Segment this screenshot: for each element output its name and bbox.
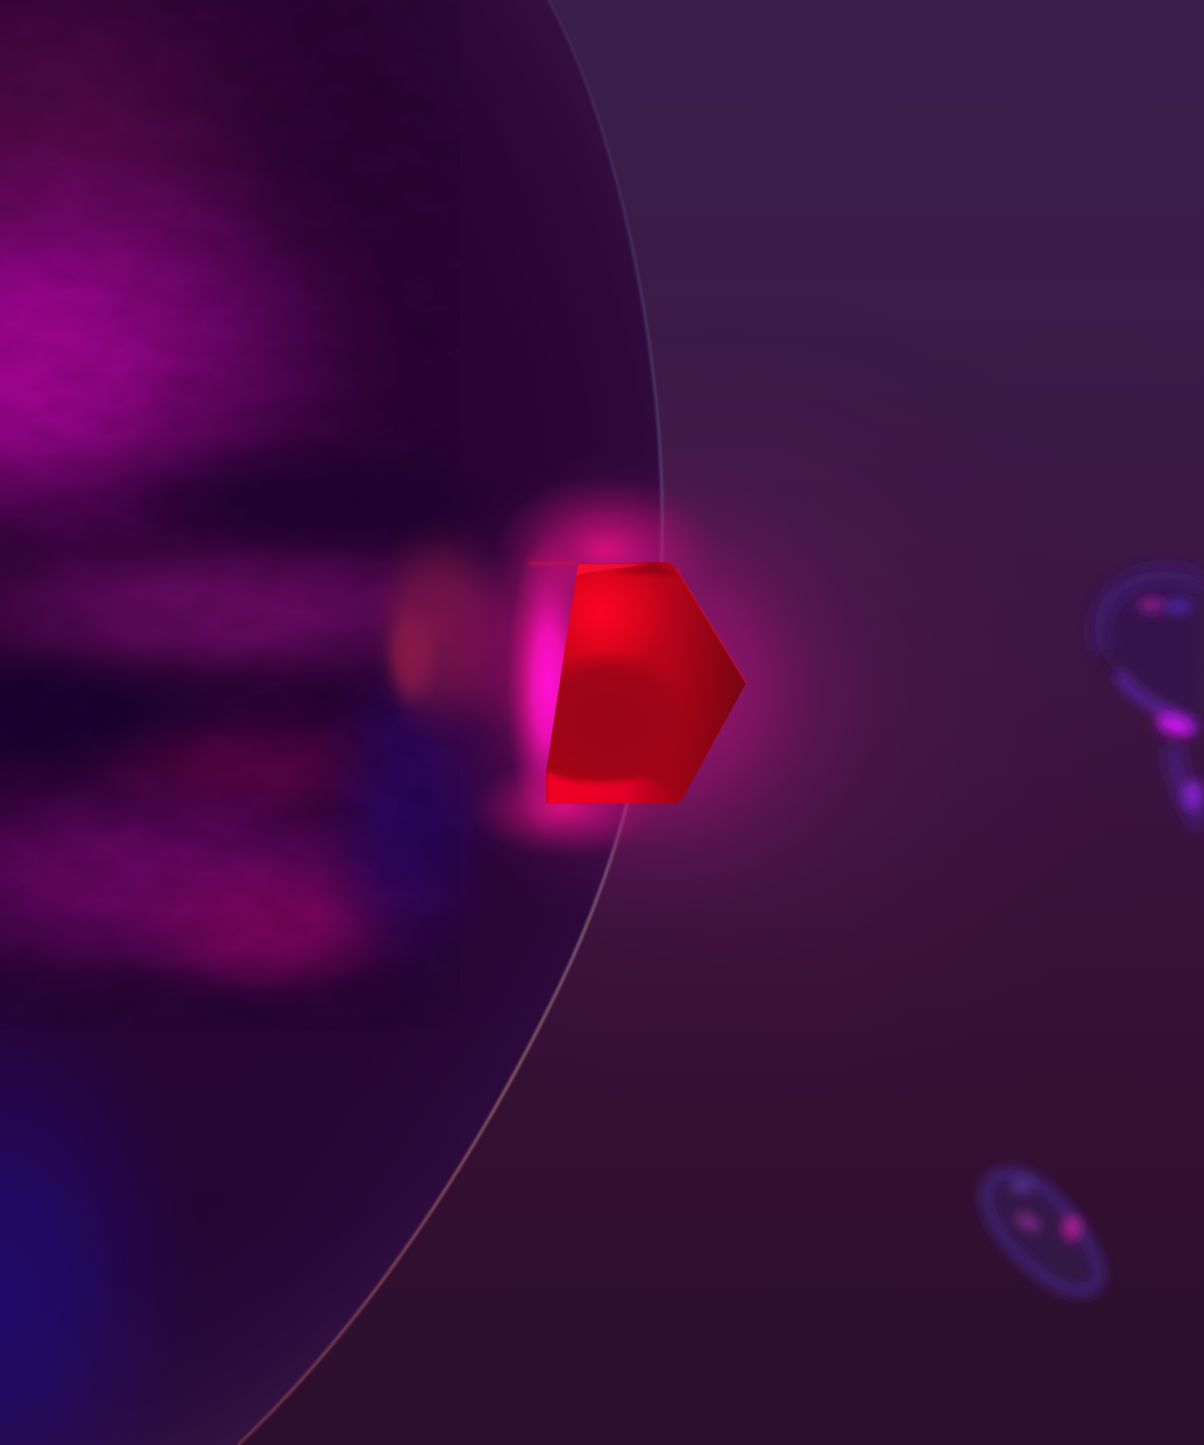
bubble: upper right droplet bbox=[1095, 572, 1204, 825]
crystal: upper right bright edge bbox=[676, 568, 746, 683]
sphere: magenta core bbox=[0, 253, 132, 488]
large sphere bbox=[0, 0, 700, 1445]
crystal: bottom bright band bbox=[546, 770, 676, 806]
crystal: lower dark facet bbox=[549, 654, 676, 754]
background glow around crystal bbox=[280, 260, 1204, 1140]
sphere: crystal reflection bbox=[376, 527, 576, 732]
sphere: blue tint bbox=[338, 680, 485, 952]
crystal: top edge glow bbox=[575, 564, 650, 576]
crystal halo bbox=[400, 445, 880, 925]
sphere: dark band upper bbox=[117, 447, 348, 532]
sphere: soft edge fade bbox=[92, 0, 655, 1445]
sphere: middle red shadow bbox=[104, 721, 368, 814]
sphere: top left haze bbox=[0, 0, 262, 236]
sphere: magenta glow bbox=[0, 141, 368, 560]
sphere: lower magenta band bbox=[0, 786, 388, 978]
sphere: lower right magenta bbox=[152, 863, 396, 998]
sphere: mid band bbox=[0, 541, 450, 680]
sphere: dark shadow bbox=[0, 663, 170, 760]
crystal: top shade bbox=[610, 562, 680, 575]
bubble: lower right droplet bbox=[985, 1172, 1100, 1292]
crystal: right shade bbox=[682, 583, 746, 788]
sphere: blue lower left bbox=[0, 1031, 166, 1445]
sphere rim bbox=[238, 0, 662, 1445]
red crystal bbox=[546, 562, 746, 804]
sphere: surface texture bbox=[0, 188, 435, 946]
